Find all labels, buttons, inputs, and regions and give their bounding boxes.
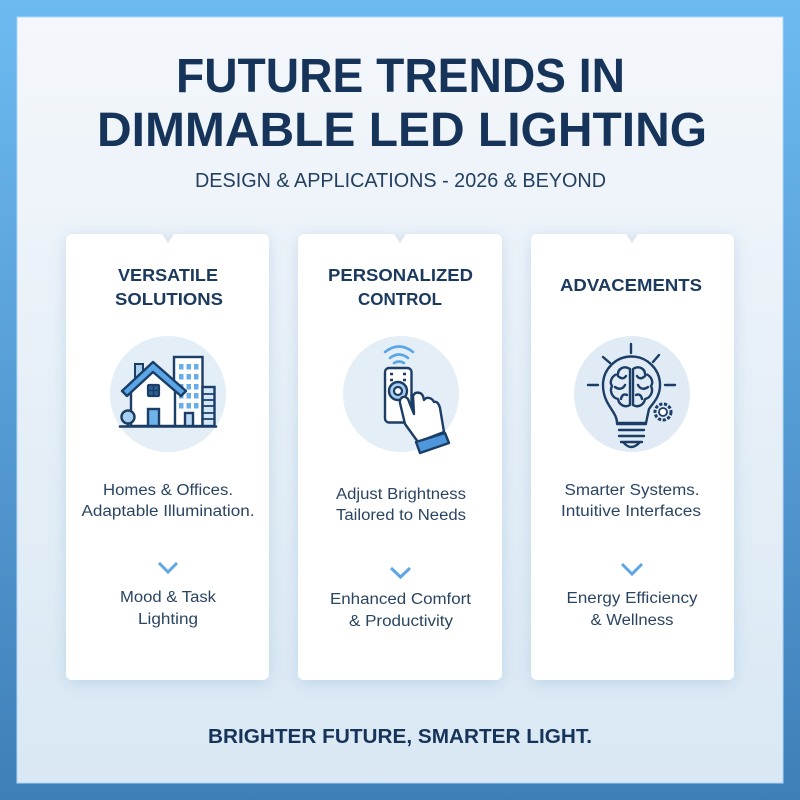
card 2 description	[336, 486, 466, 524]
footer tagline: BRIGHTER FUTURE, SMARTER LIGHT.	[208, 726, 592, 748]
icon: chevron down	[159, 563, 177, 572]
card 1 description	[82, 482, 254, 520]
card 1 outcome	[120, 589, 216, 628]
card 3 background	[531, 234, 734, 680]
card 1 heading: VERSATILE	[118, 265, 218, 285]
panel: personalized control	[298, 234, 502, 680]
icon: remote and hand	[343, 336, 459, 453]
card 2 outcome	[330, 591, 472, 630]
card 1 outcome: Mood & Task	[120, 589, 216, 606]
card 2 heading: PERSONALIZED	[328, 265, 473, 285]
card 2 heading	[328, 265, 473, 309]
card 1 outcome: Lighting	[138, 611, 198, 628]
card 3 heading: ADVACEMENTS	[560, 275, 702, 295]
card 3 outcome: Energy Efficiency	[566, 590, 698, 607]
card 3 outcome	[566, 590, 698, 629]
panel: versatile solutions	[66, 234, 269, 680]
card 2 heading: CONTROL	[358, 289, 442, 309]
panel: advancements	[531, 234, 734, 680]
card 2 description: Tailored to Needs	[336, 507, 466, 524]
card 2 background	[298, 234, 502, 680]
card 1 description: Adaptable Illumination.	[82, 503, 254, 520]
card 1 background	[66, 234, 269, 680]
card 3 description	[561, 482, 701, 520]
subtitle: DESIGN & APPLICATIONS - 2026 & BEYOND	[195, 170, 606, 192]
icon: house and office building	[110, 336, 226, 452]
card 1 heading: SOLUTIONS	[115, 289, 223, 309]
icon: chevron down	[622, 564, 642, 574]
card 3 description: Intuitive Interfaces	[561, 503, 701, 520]
card 3 description: Smarter Systems.	[564, 482, 700, 499]
card 2 outcome: Enhanced Comfort	[330, 591, 472, 608]
card 3 outcome: & Wellness	[590, 612, 674, 629]
card 1 heading	[115, 265, 223, 309]
card 1 description: Homes & Offices.	[103, 482, 233, 499]
card 2 outcome: & Productivity	[349, 613, 453, 630]
icon: chevron down	[391, 568, 410, 577]
title: FUTURE TRENDS IN	[176, 50, 625, 103]
title	[97, 50, 707, 157]
icon: light bulb with brain and gear	[574, 336, 690, 452]
card 2 description: Adjust Brightness	[336, 486, 466, 503]
title: DIMMABLE LED LIGHTING	[97, 104, 707, 157]
